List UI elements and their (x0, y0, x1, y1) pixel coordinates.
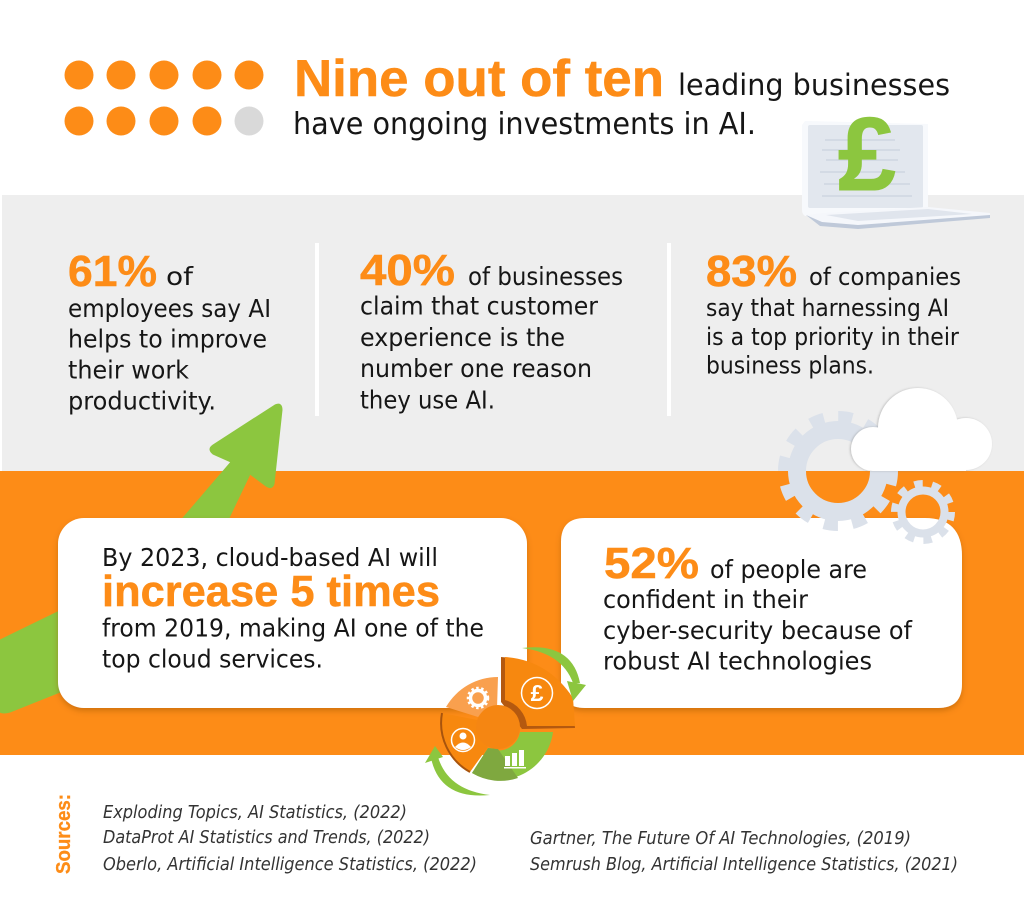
statistic: 40% of businesses: of businesses (468, 262, 623, 291)
statistic: 61% of employees (68, 247, 271, 416)
title: leading businesses (678, 68, 950, 102)
icon: laptop with pound sign (802, 97, 990, 229)
statistic: 83% of companies: business plans. (706, 352, 874, 380)
divider (315, 243, 319, 416)
sources list: left column: Exploding Topics, AI Statistics, (2022) (103, 803, 407, 823)
arrow: cycle top (522, 647, 586, 701)
card: 52% cyber-security (561, 518, 962, 708)
card: cloud-based AI: By 2023, cloud-based AI will (102, 543, 438, 572)
gray statistics band (2, 195, 1024, 472)
title (293, 50, 950, 142)
icon: business cycle ring (425, 647, 586, 796)
statistic: 61% of employees: employees say AI (68, 294, 271, 323)
hub (476, 705, 520, 749)
sources list: right column: Semrush Blog, Artificial Intelligence Statistics, (2021) (530, 855, 958, 875)
statistic: 83% of companies (706, 247, 961, 380)
icon: cloud (851, 388, 992, 471)
divider (667, 243, 671, 416)
card: cloud-based AI (58, 518, 527, 708)
statistic: 83% of companies: 83% (706, 247, 797, 296)
statistic: 83% of companies: of companies (809, 263, 961, 291)
statistic: 61% of employees: their work (68, 356, 189, 384)
statistic: 40% of businesses (360, 246, 623, 414)
statistic: 40% of businesses: number one reason (360, 354, 592, 383)
card: 52% cyber-security: robust AI technologies (603, 646, 872, 676)
title: Nine out of ten (294, 50, 664, 108)
card: 52% cyber-security: confident in their (603, 585, 809, 614)
card: 52% cyber-security: 52% (604, 539, 699, 588)
sources list: right column: Gartner, The Future Of AI Technologies, (2019) (530, 829, 911, 849)
icon: large gear (784, 417, 892, 525)
segment: chart (472, 732, 553, 781)
icon: gears and cloud (784, 388, 992, 540)
arrow: cycle bottom (425, 746, 490, 796)
sources list: left column: DataProt AI Statistics and Trends, (2022) (103, 828, 430, 848)
statistic: 61% of employees: helps to improve (68, 324, 267, 354)
card: cloud-based AI: from 2019, making AI one of the (102, 614, 484, 642)
segment: gear (446, 677, 498, 717)
sources label: Sources: (53, 794, 75, 874)
icon: small gear (894, 484, 952, 540)
nine out of ten dots pictogram (64, 60, 264, 136)
sources list: right column (530, 829, 958, 875)
card: 52% cyber-security: cyber-security because of (603, 616, 913, 645)
icon: green growth arrow (0, 404, 282, 713)
icon: laptop with pound sign: £ (838, 97, 896, 213)
statistic: 83% of companies: is a top priority in their (706, 323, 959, 351)
statistic: 61% of employees: productivity. (68, 386, 216, 416)
sources list: left column (103, 803, 477, 875)
statistic: 61% of employees: 61% (68, 247, 157, 296)
card: cloud-based AI: top cloud services. (102, 644, 323, 674)
statistic: 40% of businesses: claim that customer (360, 292, 599, 320)
card: cloud-based AI: increase 5 times (102, 567, 440, 616)
segment: person (441, 713, 488, 772)
orange band (0, 471, 1024, 755)
statistic: 83% of companies: say that harnessing AI (706, 294, 949, 322)
statistic: 40% of businesses: 40% (360, 246, 455, 295)
segment: pound: £ (531, 680, 544, 706)
statistic: 61% of employees: of (166, 262, 194, 291)
title: have ongoing investments in AI. (293, 107, 756, 142)
sources list: left column: Oberlo, Artificial Intelligence Statistics, (2022) (103, 855, 477, 875)
segment: pound (501, 657, 575, 729)
statistic: 40% of businesses: experience is the (360, 323, 565, 352)
statistic: 40% of businesses: they use AI. (360, 386, 495, 414)
card: 52% cyber-security: of people are (710, 555, 867, 584)
